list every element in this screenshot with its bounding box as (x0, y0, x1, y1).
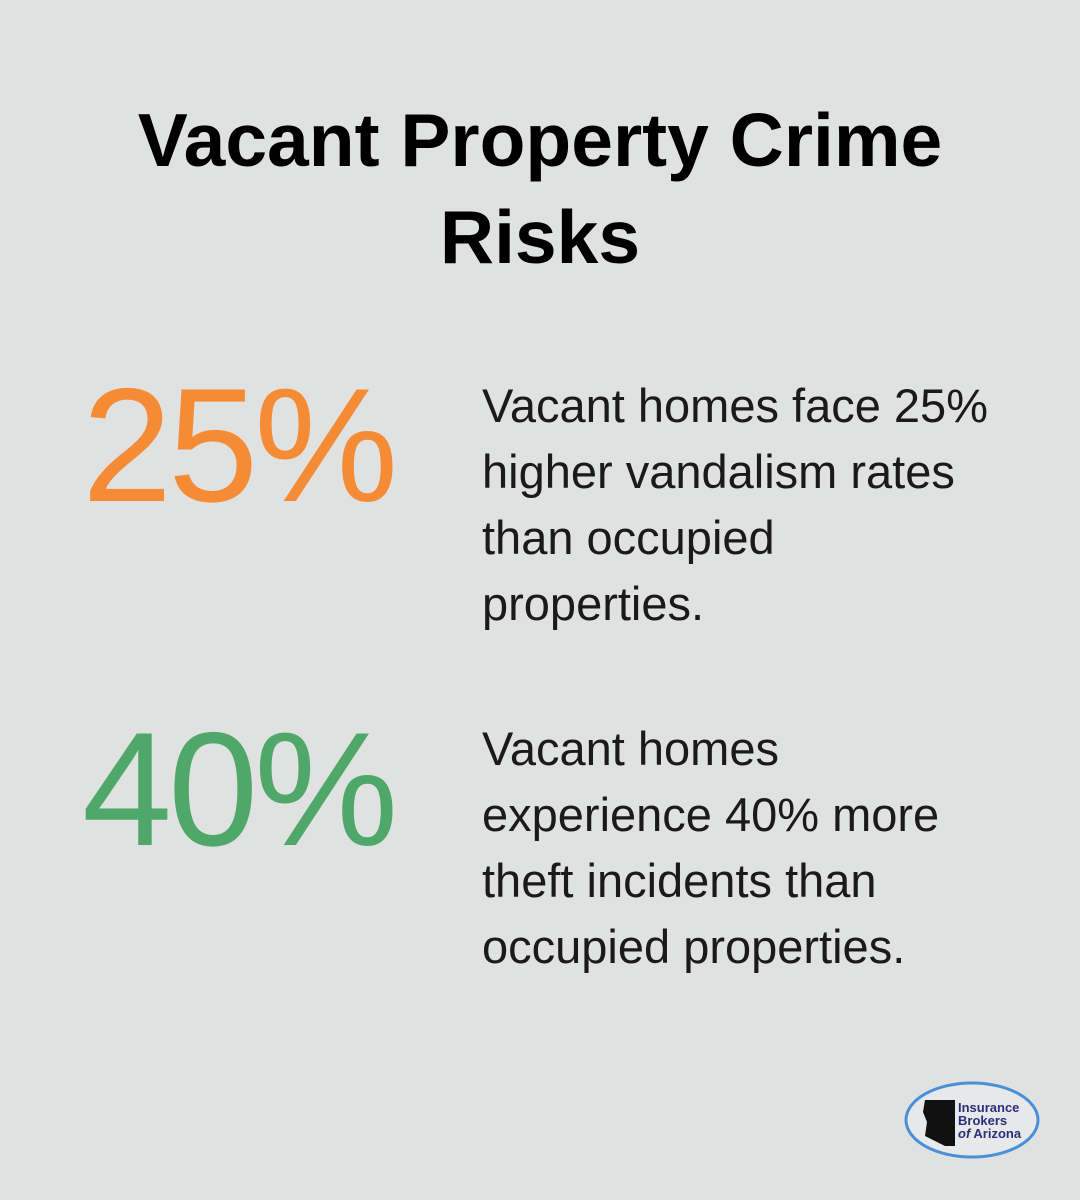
logo (904, 1082, 1040, 1158)
text: theft: theft incidents than (482, 854, 877, 907)
logo: Insurance (958, 1100, 1019, 1115)
text: theft: experience 40% more (482, 788, 939, 841)
stat: 25%: 25% (82, 355, 394, 536)
text: vandalism (482, 379, 988, 630)
title (138, 98, 942, 279)
title: Vacant Property Crime (138, 98, 942, 182)
text: vandalism: Vacant homes face 25% (482, 379, 988, 432)
text: vandalism: than occupied (482, 511, 775, 564)
text: vandalism: properties. (482, 577, 704, 630)
title: Risks (440, 195, 640, 279)
stat: 40%: 40% (82, 699, 394, 880)
text: theft (482, 722, 939, 973)
text: theft: occupied properties. (482, 920, 905, 973)
text: vandalism: higher vandalism rates (482, 445, 955, 498)
logo: Brokers (958, 1113, 1007, 1128)
text: theft: Vacant homes (482, 722, 779, 775)
logo: of Arizona (958, 1126, 1022, 1141)
